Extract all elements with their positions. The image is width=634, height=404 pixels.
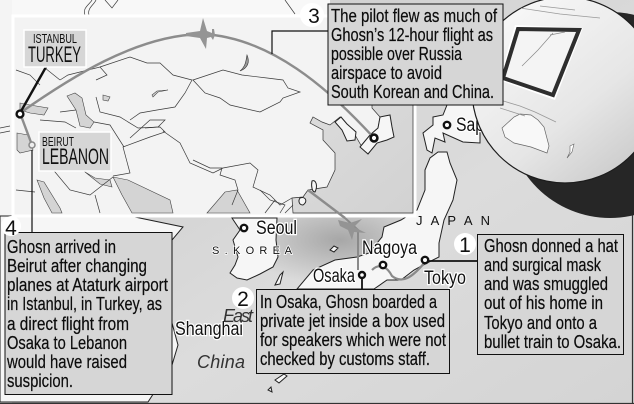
- background map: Korean peninsula: [230, 218, 278, 280]
- callout 1: and surgical mask: [484, 254, 602, 275]
- leader: step 4 line: [31, 150, 33, 232]
- label: Istanbul Turkey: [24, 30, 86, 67]
- inset map panel: [13, 16, 415, 218]
- sea label: East China Sea: East: [223, 306, 254, 326]
- country label: S.Korea: S . K O R E A: [212, 245, 293, 257]
- label: Beirut Lebanon: LEBANON: [42, 144, 109, 169]
- callout 3: [300, 3, 503, 105]
- number 4: [1, 216, 21, 240]
- number 4: 4: [5, 217, 17, 240]
- city label: Seoul: Seoul: [256, 218, 297, 239]
- city label: Sapporo: Sap: [456, 115, 484, 136]
- callout 2: for speakers which were not: [260, 329, 446, 350]
- number 2: [232, 287, 254, 311]
- background map: Japan: [268, 105, 480, 392]
- city label: Tokyo: Tokyo: [424, 268, 466, 289]
- callout 3: Ghosn’s 12-hour flight as: [331, 24, 493, 45]
- sea label: East China Sea: China: [197, 352, 245, 372]
- callout 1: [454, 233, 624, 354]
- globe shadow: [507, 12, 634, 218]
- number 1: [454, 233, 476, 257]
- callout 4: suspicion.: [7, 370, 73, 391]
- inset: country borders: [16, 57, 300, 213]
- leader: Tokyo line: [425, 260, 477, 262]
- callout 2: In Osaka, Ghosn boarded a: [260, 291, 438, 312]
- callout 4: a direct flight from: [7, 313, 129, 334]
- background map: Asian mainland: [0, 0, 330, 404]
- callout 2: [232, 287, 450, 374]
- callout 4: Osaka to Lebanon: [7, 332, 127, 353]
- callout 3: possible over Russia: [331, 43, 463, 64]
- icon: plane over Russia: [186, 18, 215, 49]
- callout 4: planes at Ataturk airport: [7, 274, 168, 295]
- sea label: East China Sea: [197, 306, 254, 372]
- callout 1: out of his home in: [484, 292, 603, 313]
- globe: Australia: [502, 114, 549, 153]
- number 3: 3: [308, 5, 320, 28]
- city label: Shanghai: Shanghai: [175, 319, 243, 340]
- city label: Nagoya: [362, 238, 417, 268]
- callout 4: would have raised: [6, 351, 127, 372]
- city label: Seoul: [241, 218, 297, 239]
- callout 2: private jet inside a box used: [260, 310, 445, 331]
- callout 3: The pilot flew as much of: [331, 5, 498, 26]
- label: Beirut Lebanon: BEIRUT: [42, 134, 74, 149]
- globe: New Zealand: [567, 144, 574, 158]
- marker: Istanbul: [17, 111, 23, 117]
- globe: islands: [500, 6, 600, 122]
- callout 4: in Istanbul, in Turkey, as: [7, 293, 162, 314]
- marker: Osaka on inset: [371, 135, 377, 141]
- Osaka onward flight path and plane: [338, 218, 425, 280]
- leader: Istanbul: [20, 67, 46, 113]
- number 2: 2: [237, 288, 249, 311]
- inset: seas: [17, 55, 413, 213]
- callout 2: checked by customs staff.: [260, 348, 430, 369]
- callout 3: South Korean and China.: [331, 81, 494, 102]
- city label: Tokyo: [422, 257, 466, 289]
- callout 1: and was smuggled: [484, 273, 608, 294]
- callout 4: [1, 216, 172, 394]
- number 3: [300, 3, 324, 28]
- leader: step 3 line: [272, 31, 328, 54]
- callout 4: Beirut after changing: [7, 255, 147, 276]
- country label: Japan: J A P A N: [416, 213, 490, 228]
- callout 3: airspace to avoid: [331, 62, 442, 83]
- label: Istanbul Turkey: ISTANBUL: [33, 31, 77, 46]
- city label: Sapporo: [444, 115, 484, 136]
- label: Beirut Lebanon: [39, 132, 111, 171]
- globe: map locator frame: [499, 25, 583, 100]
- city label: Osaka: Osaka: [313, 266, 355, 287]
- leader: Osaka line: [361, 276, 363, 289]
- outer frame edge: [0, 215, 634, 404]
- callout 4: Ghosn arrived in: [7, 236, 116, 257]
- city label: Nagoya: Nagoya: [362, 238, 417, 259]
- globe: [472, 0, 634, 183]
- marker: Beirut: [29, 142, 35, 148]
- inset: gray flight path: [20, 34, 374, 218]
- number 1: 1: [459, 234, 471, 257]
- callout 1: Tokyo and onto a: [484, 312, 598, 333]
- label: Istanbul Turkey: TURKEY: [28, 42, 81, 67]
